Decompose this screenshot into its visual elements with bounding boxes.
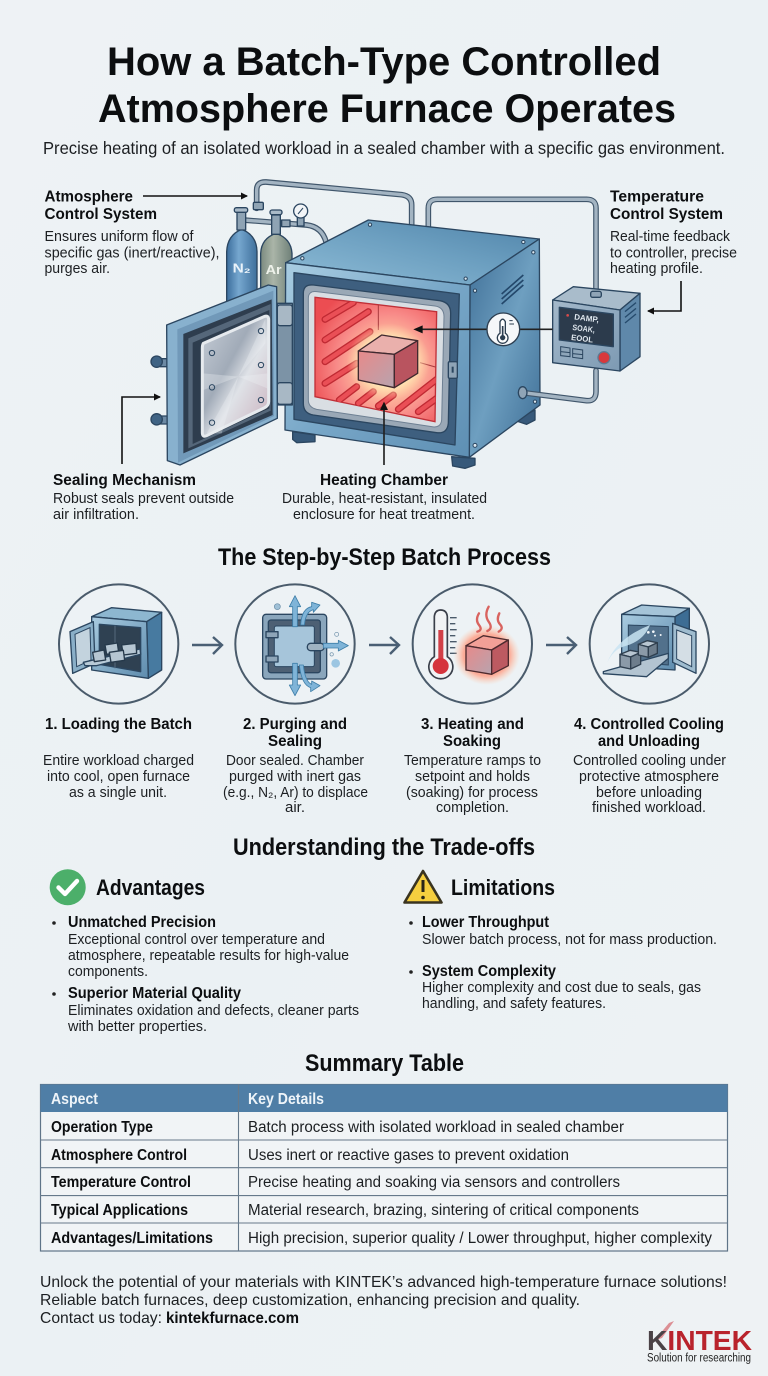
arrow: step 1 to 2 <box>192 637 222 654</box>
table row: atmosphere control: Atmosphere Control <box>51 1147 187 1164</box>
heading: trade-offs: Understanding the Trade-offs <box>233 834 535 861</box>
callout: atmosphere control system: Control System <box>44 206 157 223</box>
furnace diagram <box>151 182 640 468</box>
footer call to action: Contact us today: <box>40 1310 162 1327</box>
callout: temperature control system <box>610 188 737 277</box>
icon: temperature controller <box>518 287 640 401</box>
icon: temperature controller: SOAK, <box>572 323 595 335</box>
panel: advantages <box>50 869 359 1035</box>
table row: temperature control: Temperature Control <box>51 1174 191 1191</box>
step 3 text: 3. Heating and <box>421 716 524 733</box>
callout: heating chamber: Heating Chamber <box>320 472 448 489</box>
step 3 text: setpoint and holds <box>415 769 530 785</box>
table row: advantages and limitations <box>51 1230 712 1247</box>
callout: temperature control system: Control System <box>610 206 723 223</box>
panel: advantages: components. <box>68 964 148 980</box>
callout: heating chamber: Durable, heat-resistant, insulated <box>282 491 487 507</box>
icon: step 3 heating <box>413 584 532 704</box>
callout: sealing mechanism: Sealing Mechanism <box>53 472 196 489</box>
icon: argon cylinder <box>261 210 292 310</box>
footer call to action: Unlock the potential of your materials with KINTEK’s advanced high-temperature furnace solutions! <box>40 1274 727 1291</box>
heading: summary table: Summary Table <box>305 1050 464 1077</box>
callout: atmosphere control system: purges air. <box>44 261 110 277</box>
panel: limitations: Higher complexity and cost due to seals, gas <box>422 980 701 996</box>
table row: operation type: Operation Type <box>51 1119 153 1136</box>
callout: atmosphere control system: Ensures uniform flow of <box>44 229 194 245</box>
step 2 text: purged with inert gas <box>229 769 361 785</box>
panel: heating chamber interior <box>315 297 437 422</box>
table row: advantages and limitations: High precision, superior quality / Lower throughput, higher complexity <box>248 1230 712 1247</box>
panel: limitations: System Complexity <box>422 963 556 980</box>
icon: gas pipes <box>243 182 596 293</box>
panel: limitations: handling, and safety features. <box>422 996 606 1012</box>
step 3 text: completion. <box>436 800 509 816</box>
icon: pressure gauge <box>294 204 308 226</box>
step 4 text <box>573 716 726 816</box>
panel: advantages: Superior Material Quality <box>68 985 241 1002</box>
table header <box>51 1091 324 1108</box>
panel: advantages: Exceptional control over temperature and <box>68 932 325 948</box>
step 1 text: 1. Loading the Batch <box>45 716 192 733</box>
panel: limitations: Slower batch process, not for mass production. <box>422 932 717 948</box>
step 4 text: finished workload. <box>592 800 706 816</box>
panel: advantages: atmosphere, repeatable results for high-value <box>68 948 349 964</box>
callout: sealing mechanism: Robust seals prevent outside <box>53 491 234 507</box>
callout: temperature control system: Real-time feedback <box>610 229 731 245</box>
icon: argon cylinder: Ar <box>266 262 282 277</box>
step 1 text: Entire workload charged <box>43 753 194 769</box>
heading: step-by-step: The Step-by-Step Batch Process <box>218 544 551 571</box>
table row: typical applications: Typical Applications <box>51 1202 188 1219</box>
step 4 text: Controlled cooling under <box>573 753 726 769</box>
icon: temperature controller: DAMP, <box>574 312 599 324</box>
step 4 text: and Unloading <box>598 733 700 750</box>
title <box>98 40 676 131</box>
step 4 text: before unloading <box>596 785 702 801</box>
icon: workload cube <box>358 335 418 388</box>
footer call to action: Reliable batch furnaces, deep customization, enhancing precision and quality. <box>40 1292 580 1309</box>
table row: typical applications: Material research, brazing, sintering of critical components <box>248 1202 639 1219</box>
step 2 text: 2. Purging and <box>243 716 347 733</box>
icon: step 1 loading <box>59 584 178 704</box>
callout: heating chamber <box>282 472 487 523</box>
panel: limitations: Limitations <box>451 875 555 900</box>
step 4 text: 4. Controlled Cooling <box>574 716 724 733</box>
panel: furnace body <box>285 220 540 468</box>
table row: operation type <box>51 1119 624 1136</box>
logo: KINTEK: Solution for researching <box>647 1352 751 1364</box>
callout: heating chamber: enclosure for heat treatment. <box>293 507 475 523</box>
table row: temperature control: Precise heating and soaking via sensors and controllers <box>248 1174 620 1191</box>
arrow: temperature feedback <box>413 325 553 333</box>
table row: advantages and limitations: Advantages/Limitations <box>51 1230 213 1247</box>
step 2 text: air. <box>285 800 305 816</box>
title: Atmosphere Furnace Operates <box>98 87 676 131</box>
table row: atmosphere control: Uses inert or reactive gases to prevent oxidation <box>248 1147 569 1164</box>
icon: thermometer badge <box>487 313 520 346</box>
footer call to action <box>40 1274 727 1327</box>
step 4 text: protective atmosphere <box>579 769 719 785</box>
arrow: step 2 to 3 <box>369 637 399 654</box>
step 3 text: Soaking <box>443 733 501 750</box>
panel: limitations <box>404 871 717 1012</box>
table row: temperature control <box>51 1174 620 1191</box>
callout: atmosphere control system: specific gas (inert/reactive), <box>44 246 220 262</box>
summary table <box>40 1084 728 1251</box>
icon: green check <box>50 869 86 905</box>
arrow: atmosphere callout <box>143 195 247 197</box>
panel: advantages: Unmatched Precision <box>68 914 216 931</box>
table row: atmosphere control <box>51 1147 569 1164</box>
step 3 text: (soaking) for process <box>406 785 538 801</box>
icon: nitrogen cylinder: N₂ <box>233 261 251 276</box>
icon: furnace door <box>151 285 292 465</box>
panel: advantages: Advantages <box>96 875 205 900</box>
footer call to action: kintekfurnace.com <box>166 1310 299 1327</box>
callout: sealing mechanism: air infiltration. <box>53 507 139 523</box>
table row: typical applications <box>51 1202 639 1219</box>
table header: Key Details <box>248 1091 324 1108</box>
panel: advantages: Eliminates oxidation and defects, cleaner parts <box>68 1003 359 1019</box>
step 2 text: (e.g., N₂, Ar) to displace <box>223 785 368 801</box>
callout: atmosphere control system <box>44 188 220 277</box>
arrow: heating chamber pointer <box>380 402 388 465</box>
logo: KINTEK <box>647 1321 752 1364</box>
callout: temperature control system: heating profile. <box>610 261 703 277</box>
step 3 text <box>404 716 541 816</box>
step 1 text: into cool, open furnace <box>47 769 190 785</box>
icon: temperature controller: EOOL <box>571 333 594 345</box>
panel: limitations: Lower Throughput <box>422 914 549 931</box>
step 2 text <box>223 716 368 816</box>
icon: step 4 cooling <box>590 584 709 704</box>
callout: sealing mechanism <box>53 472 234 523</box>
step 2 text: Sealing <box>268 733 322 750</box>
table header: Aspect <box>51 1091 98 1108</box>
logo: KINTEK: KINTEK <box>647 1325 752 1356</box>
panel: advantages: with better properties. <box>67 1019 207 1035</box>
icon: nitrogen cylinder <box>227 208 257 303</box>
callout: temperature control system: Temperature <box>610 188 704 206</box>
callout: temperature control system: to controller, precise <box>610 246 737 262</box>
step 3 text: Temperature ramps to <box>404 753 541 769</box>
step 1 text <box>43 716 194 801</box>
callout: atmosphere control system: Atmosphere <box>44 188 133 206</box>
title: How a Batch-Type Controlled <box>107 40 661 84</box>
step 2 text: Door sealed. Chamber <box>226 753 364 769</box>
table row: operation type: Batch process with isolated workload in sealed chamber <box>248 1119 624 1136</box>
icon: step 2 purging <box>235 584 355 704</box>
arrow: temperature callout <box>648 281 681 311</box>
step 1 text: as a single unit. <box>69 785 167 801</box>
arrow: step 3 to 4 <box>546 637 576 654</box>
arrow: sealing callout <box>122 397 160 464</box>
icon: warning triangle <box>404 871 442 902</box>
subtitle: Precise heating of an isolated workload in a sealed chamber with a specific gas environment. <box>43 138 725 158</box>
